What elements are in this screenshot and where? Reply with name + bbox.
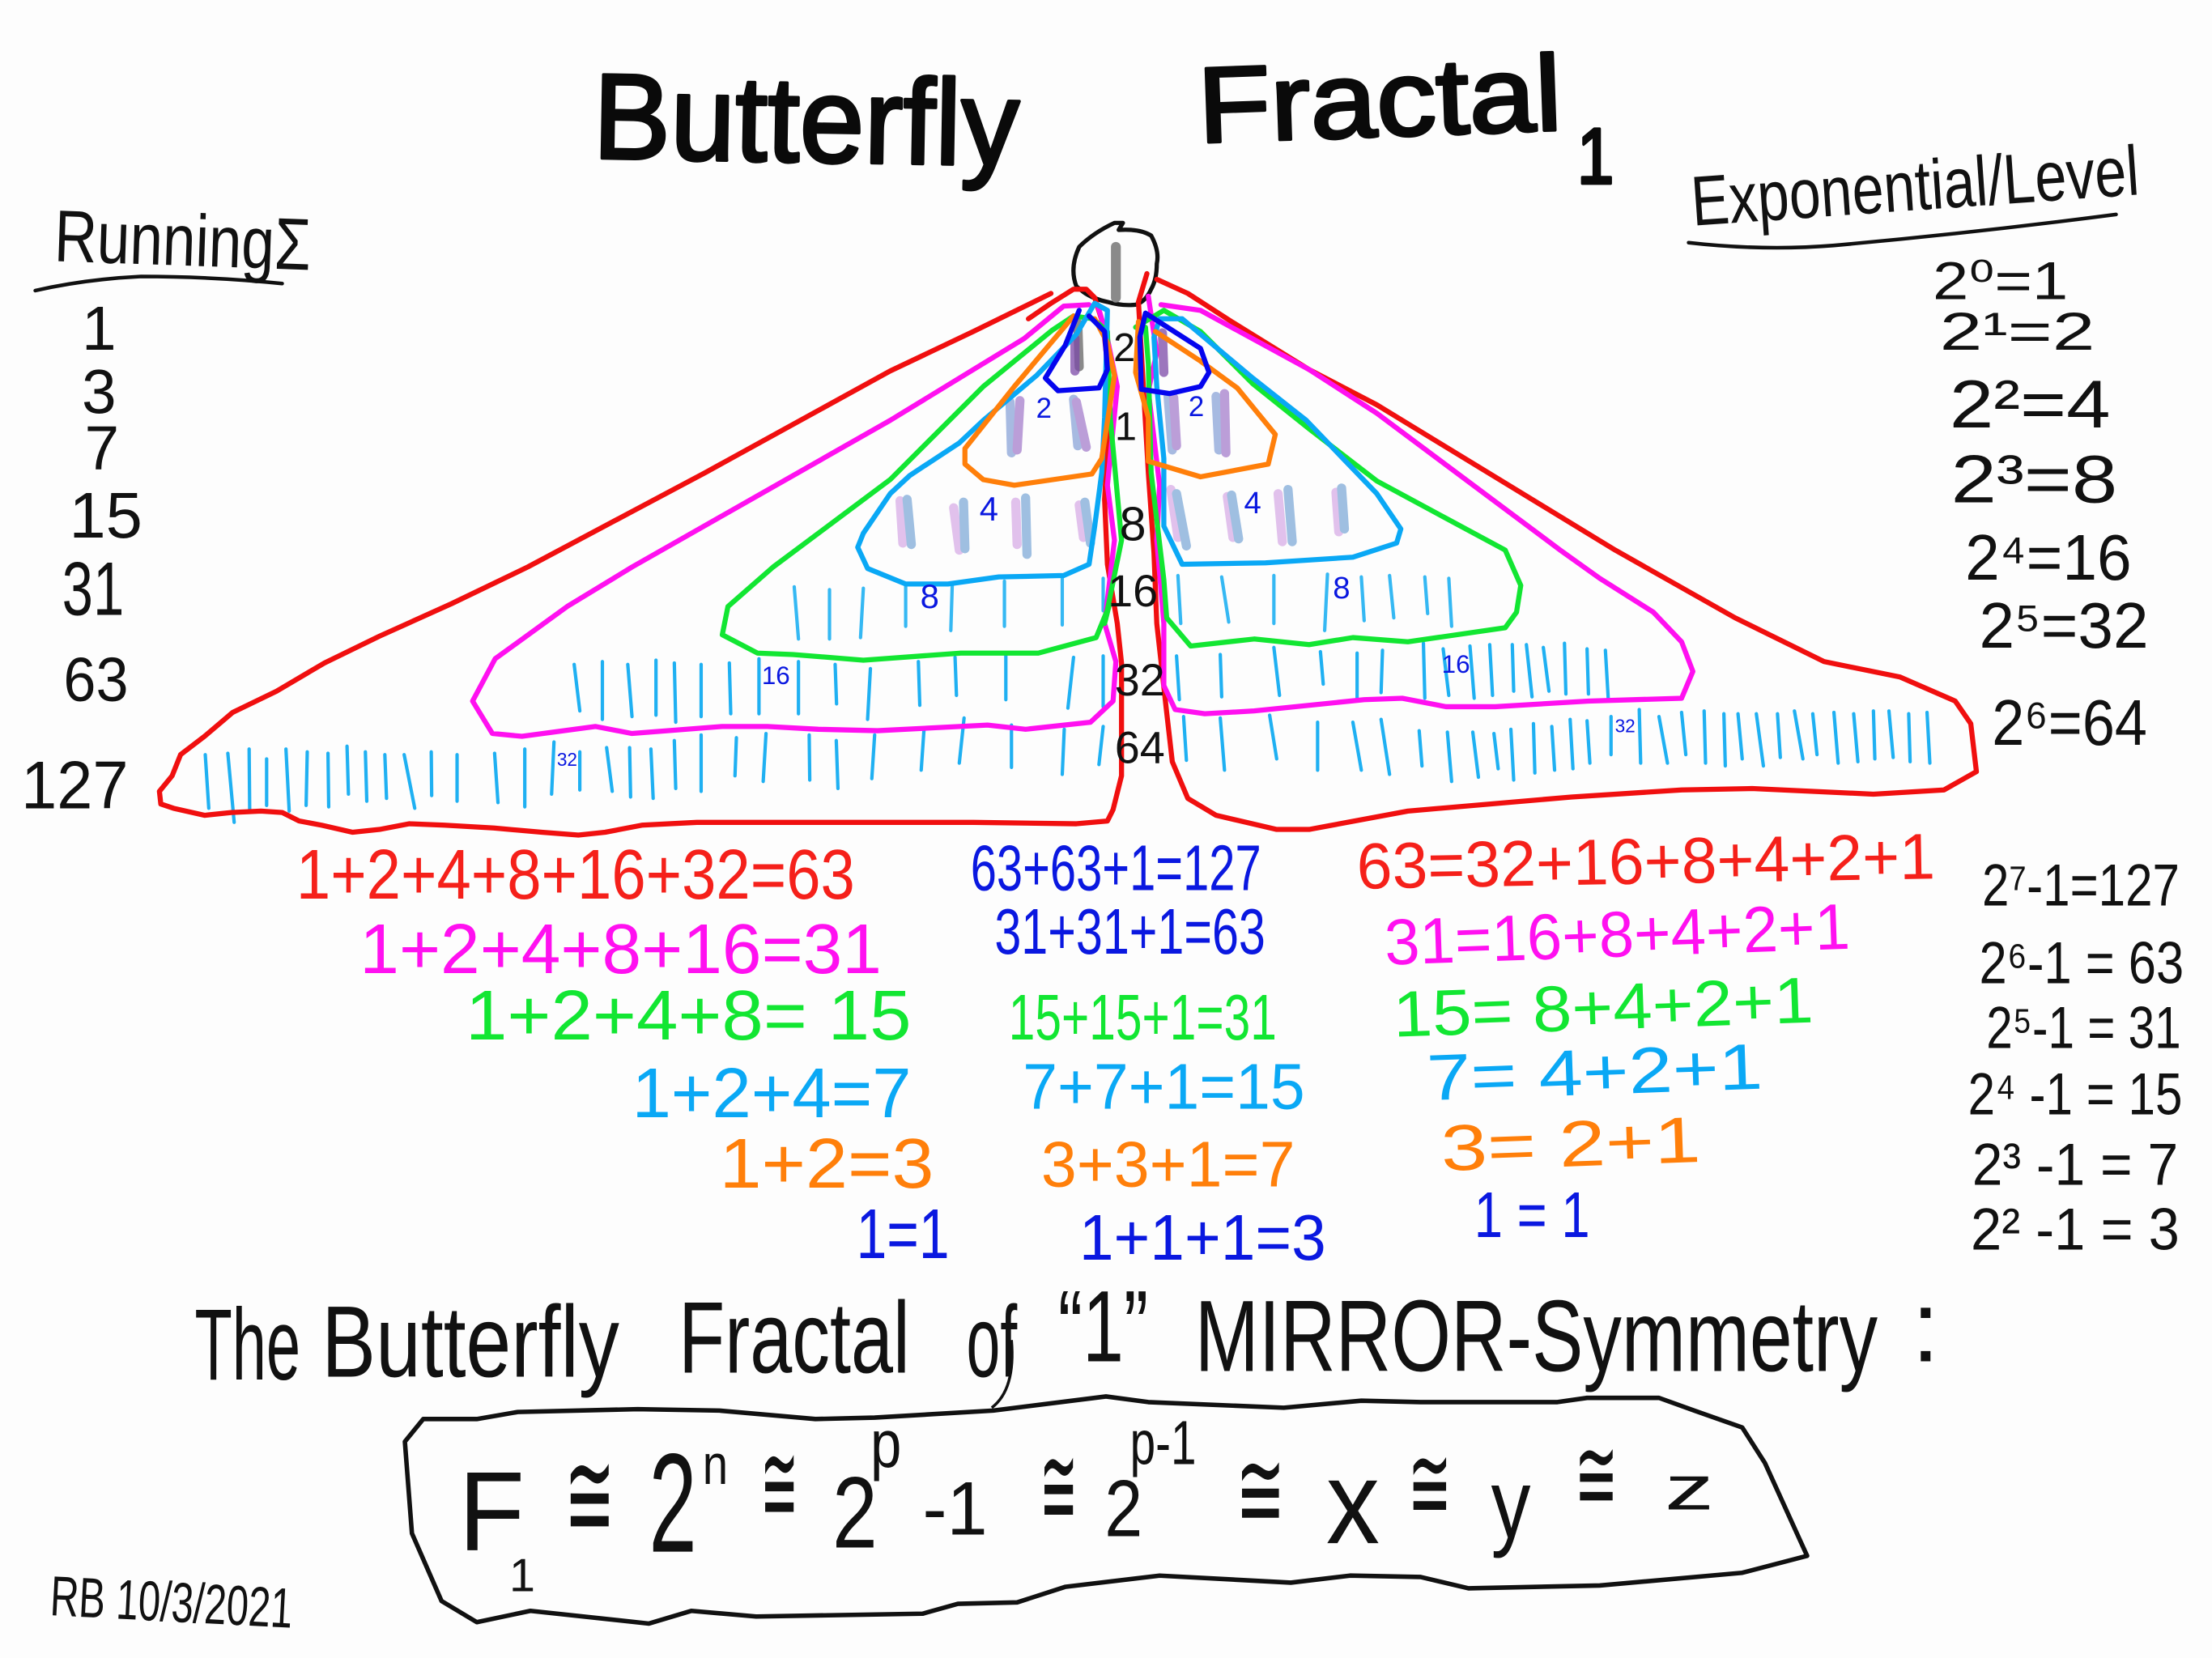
- running sum column: 15: [69, 478, 143, 551]
- wing count labels: 8: [921, 577, 939, 615]
- equations: left column: 1+2+4+8= 15: [466, 976, 912, 1055]
- formula box: ≅: [1236, 1428, 1285, 1551]
- powers minus one column: [1968, 852, 2184, 1263]
- exponential per level column: [1688, 131, 2149, 759]
- title: Fractal: [1196, 33, 1563, 166]
- statement heading: MIRROR-Symmetry: [1195, 1279, 1878, 1393]
- running sum column: 1: [82, 295, 117, 363]
- formula box: n: [703, 1433, 728, 1496]
- wing count labels: 2: [1036, 393, 1052, 424]
- wing count labels: 4: [980, 490, 998, 528]
- equations: right column: 1 = 1: [1474, 1178, 1590, 1251]
- wing count labels: 32: [1615, 715, 1636, 736]
- running sum column: [21, 195, 313, 823]
- formula box: ≅: [760, 1420, 798, 1546]
- wing count labels: 16: [762, 661, 790, 690]
- tick marks: level 1: [1075, 323, 1163, 372]
- running sum column: 7: [85, 414, 119, 483]
- equations: left column: 1+2+4=7: [632, 1054, 912, 1133]
- formula box: 1: [509, 1550, 535, 1601]
- title: 1: [1577, 113, 1614, 201]
- tick marks: level 8: [794, 574, 1452, 639]
- body level numbers: 64: [1115, 723, 1165, 773]
- green wings: [722, 310, 1521, 660]
- running sum column: 31: [62, 546, 124, 631]
- formula box: z: [1665, 1454, 1714, 1523]
- dark blue wings: [1045, 310, 1209, 393]
- body level numbers: 2: [1113, 326, 1135, 370]
- formula box: 2: [649, 1424, 697, 1582]
- running sum column: 63: [63, 646, 129, 715]
- equations: middle column: 31+31+1=63: [994, 895, 1266, 967]
- exponential per level column: 2⁴=16: [1965, 521, 2132, 593]
- wing count labels: 2: [1189, 391, 1204, 423]
- formula box: 2: [832, 1455, 878, 1569]
- statement heading: [194, 1269, 1940, 1408]
- powers minus one column: 2³ -1 = 7: [1972, 1132, 2178, 1198]
- formula box: ≅: [564, 1426, 615, 1564]
- exponential per level column: 2⁰=1: [1933, 251, 2068, 311]
- magenta wings: [473, 296, 1693, 737]
- title: Butterfly: [592, 48, 1020, 191]
- tick marks: level 2: [1010, 393, 1226, 453]
- body level numbers: 32: [1115, 655, 1165, 705]
- statement heading: of: [967, 1285, 1018, 1399]
- statement heading: :: [1912, 1269, 1940, 1383]
- wing count labels: 4: [1244, 486, 1261, 521]
- formula box: ≅: [1574, 1417, 1618, 1531]
- equations: left column: 1+2+4+8+16=31: [359, 910, 882, 988]
- equations: middle column: 1+1+1=3: [1079, 1201, 1326, 1273]
- formula box: p-1: [1130, 1409, 1197, 1478]
- body level numbers: [1108, 326, 1165, 773]
- orange wings: [965, 316, 1275, 485]
- signature: RB 10/3/2021: [49, 1564, 295, 1640]
- equations: right column: 63=32+16+8+4+2+1: [1356, 819, 1936, 903]
- butterfly diagram: [160, 223, 1976, 835]
- equations: middle column: [971, 831, 1326, 1273]
- head: [1074, 223, 1158, 305]
- equations: left column: 1+2+4+8+16+32=63: [296, 835, 855, 914]
- exponential per level column: 2⁶=64: [1992, 686, 2147, 759]
- statement heading: The: [194, 1287, 300, 1401]
- title: [592, 33, 1614, 201]
- powers minus one column: 2² -1 = 3: [1971, 1197, 2180, 1263]
- formula box: [405, 1397, 1807, 1623]
- equations: middle column: 3+3+1=7: [1041, 1127, 1295, 1200]
- tick marks: level 32: [206, 709, 1930, 823]
- light blue wings: [857, 304, 1401, 584]
- equations: right column: 7= 4+2+1: [1426, 1030, 1763, 1114]
- formula box: x: [1326, 1437, 1380, 1569]
- exponential per level column: 2³=8: [1951, 440, 2117, 517]
- equations: left column: 1=1: [857, 1195, 950, 1273]
- statement heading: “1”: [1058, 1269, 1148, 1383]
- equations: right column: [1356, 819, 1936, 1251]
- equations: middle column: 15+15+1=31: [1009, 980, 1277, 1053]
- equations: middle column: 63+63+1=127: [971, 831, 1261, 903]
- wing count labels: [557, 391, 1636, 770]
- tick marks: level 16: [574, 644, 1608, 722]
- equations: left column: 1+2=3: [720, 1124, 934, 1203]
- wing count labels: 16: [1442, 650, 1470, 678]
- formula box: 2: [1104, 1464, 1142, 1554]
- formula box: -1: [922, 1466, 988, 1551]
- exponential per level column: 2⁵=32: [1980, 589, 2149, 661]
- body level numbers: 16: [1108, 566, 1158, 616]
- wing count labels: 8: [1333, 571, 1351, 606]
- equations: right column: 31=16+8+4+2+1: [1383, 890, 1851, 979]
- formula box: F: [458, 1448, 525, 1575]
- wing count labels: 32: [557, 749, 577, 770]
- exponential per level column: 2²=4: [1950, 366, 2111, 442]
- statement heading: Fractal: [678, 1280, 910, 1394]
- running sum column: RunningΣ: [53, 195, 313, 286]
- running sum column: 3: [82, 359, 117, 427]
- running sum column: 127: [21, 746, 129, 823]
- body level numbers: 8: [1120, 496, 1146, 551]
- tick marks: level 4: [900, 488, 1344, 555]
- equations: middle column: 7+7+1=15: [1023, 1050, 1305, 1123]
- formula box: ≅: [1408, 1426, 1452, 1542]
- formula box: y: [1491, 1448, 1530, 1558]
- formula box: ≅: [1040, 1422, 1078, 1549]
- formula box: p: [870, 1405, 901, 1482]
- body level numbers: 1: [1115, 406, 1137, 449]
- equations: right column: 3= 2+1: [1440, 1103, 1702, 1184]
- statement heading: Butterfly: [321, 1285, 619, 1399]
- equations: right column: 15= 8+4+2+1: [1392, 963, 1814, 1051]
- exponential per level column: 2¹=2: [1940, 302, 2095, 362]
- red wings: [160, 274, 1976, 835]
- equations: left column: [296, 835, 950, 1273]
